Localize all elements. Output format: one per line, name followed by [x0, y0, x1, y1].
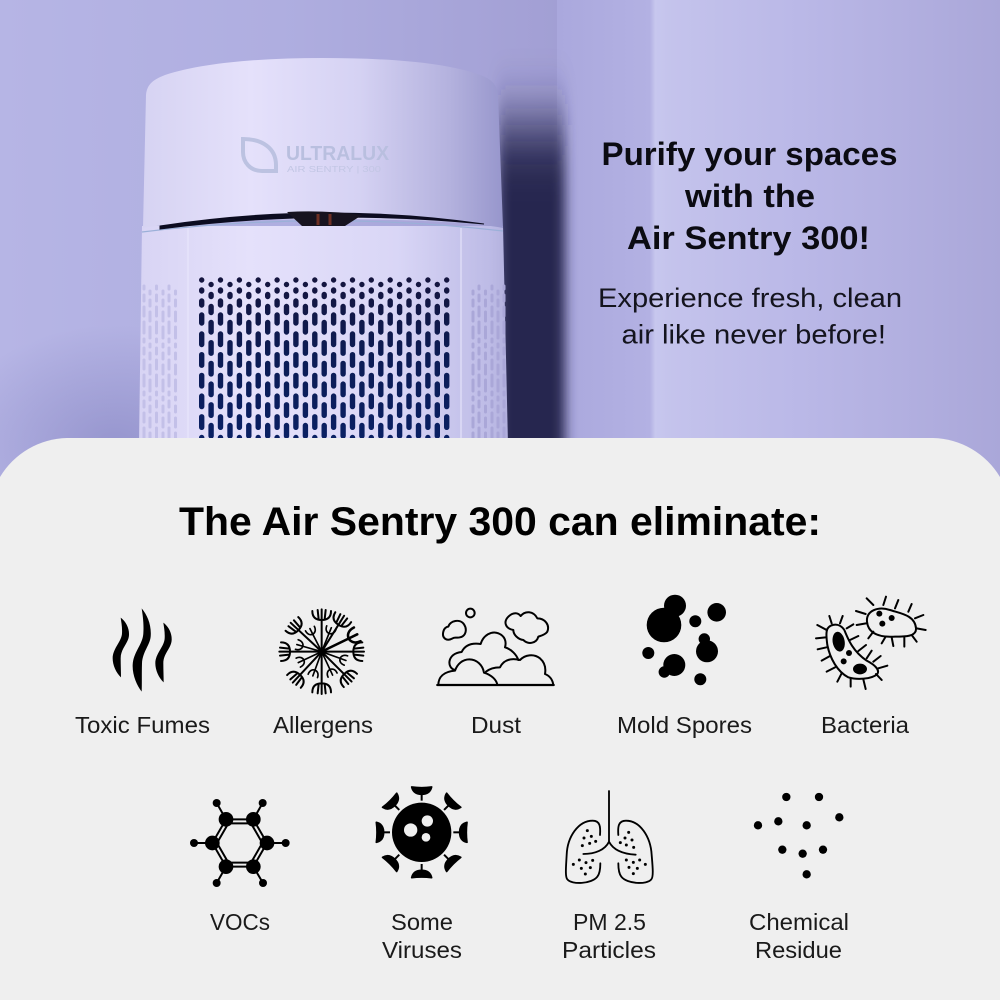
- item: some viruses: Viruses: [382, 937, 462, 963]
- item: some viruses: [376, 787, 467, 963]
- subheading: air like never before!: [622, 320, 886, 350]
- purifier body: [139, 226, 508, 445]
- icon: spores: [642, 595, 726, 685]
- icon: residue dots: [754, 793, 843, 878]
- logo model: AIR SENTRY | 300: [287, 164, 381, 174]
- section heading: The Air Sentry 300 can eliminate:: [179, 500, 821, 544]
- item: VOCs: VOCs: [210, 909, 270, 935]
- item: bacteria: Bacteria: [821, 712, 909, 738]
- item: PM 2.5 particles: Particles: [562, 937, 656, 963]
- item: chemical residue: [749, 793, 849, 963]
- purifier top cap: [143, 58, 503, 228]
- icon: dandelion: [279, 609, 364, 694]
- logo wordmark: ULTRALUX: [286, 143, 390, 165]
- subheading: [598, 283, 902, 350]
- item: chemical residue: Residue: [755, 937, 842, 963]
- logo leaf: [243, 139, 276, 171]
- logo: [243, 139, 390, 174]
- item: dust: [437, 609, 554, 738]
- item: allergens: [273, 609, 373, 738]
- item: PM 2.5 particles: PM 2.5: [573, 909, 646, 935]
- item: PM 2.5 particles: [562, 791, 656, 963]
- item: VOCs: [190, 799, 290, 935]
- item: chemical residue: Chemical: [749, 909, 849, 935]
- headline: [602, 136, 898, 256]
- panel seams: [188, 228, 461, 438]
- icon: clouds: [437, 609, 554, 685]
- item: toxic fumes: Toxic Fumes: [75, 712, 210, 738]
- icon: virus: [376, 787, 467, 878]
- headline: Purify your spaces: [602, 136, 898, 172]
- icon: molecule: [190, 799, 290, 887]
- dark slit with notch: [160, 213, 484, 229]
- icon: fumes: [113, 608, 172, 692]
- main grille: [202, 280, 447, 440]
- air purifier product: [139, 58, 508, 445]
- item: dust: Dust: [471, 712, 522, 738]
- rim highlight: [142, 221, 503, 232]
- icon: bacteria: [816, 597, 926, 689]
- item: bacteria: [816, 597, 926, 738]
- display notch: [287, 211, 362, 226]
- item: toxic fumes: [75, 608, 210, 738]
- item: mold spores: [617, 595, 752, 738]
- item: mold spores: Mold Spores: [617, 712, 752, 738]
- headline: Air Sentry 300!: [627, 220, 870, 256]
- subheading: Experience fresh, clean: [598, 283, 902, 313]
- icon: lungs: [566, 791, 653, 883]
- side perforations: [144, 286, 504, 438]
- background wall: [0, 0, 1000, 565]
- item: allergens: Allergens: [273, 712, 373, 738]
- item: some viruses: Some: [391, 909, 453, 935]
- headline: with the: [684, 178, 815, 214]
- bottom panel: [0, 438, 1000, 1000]
